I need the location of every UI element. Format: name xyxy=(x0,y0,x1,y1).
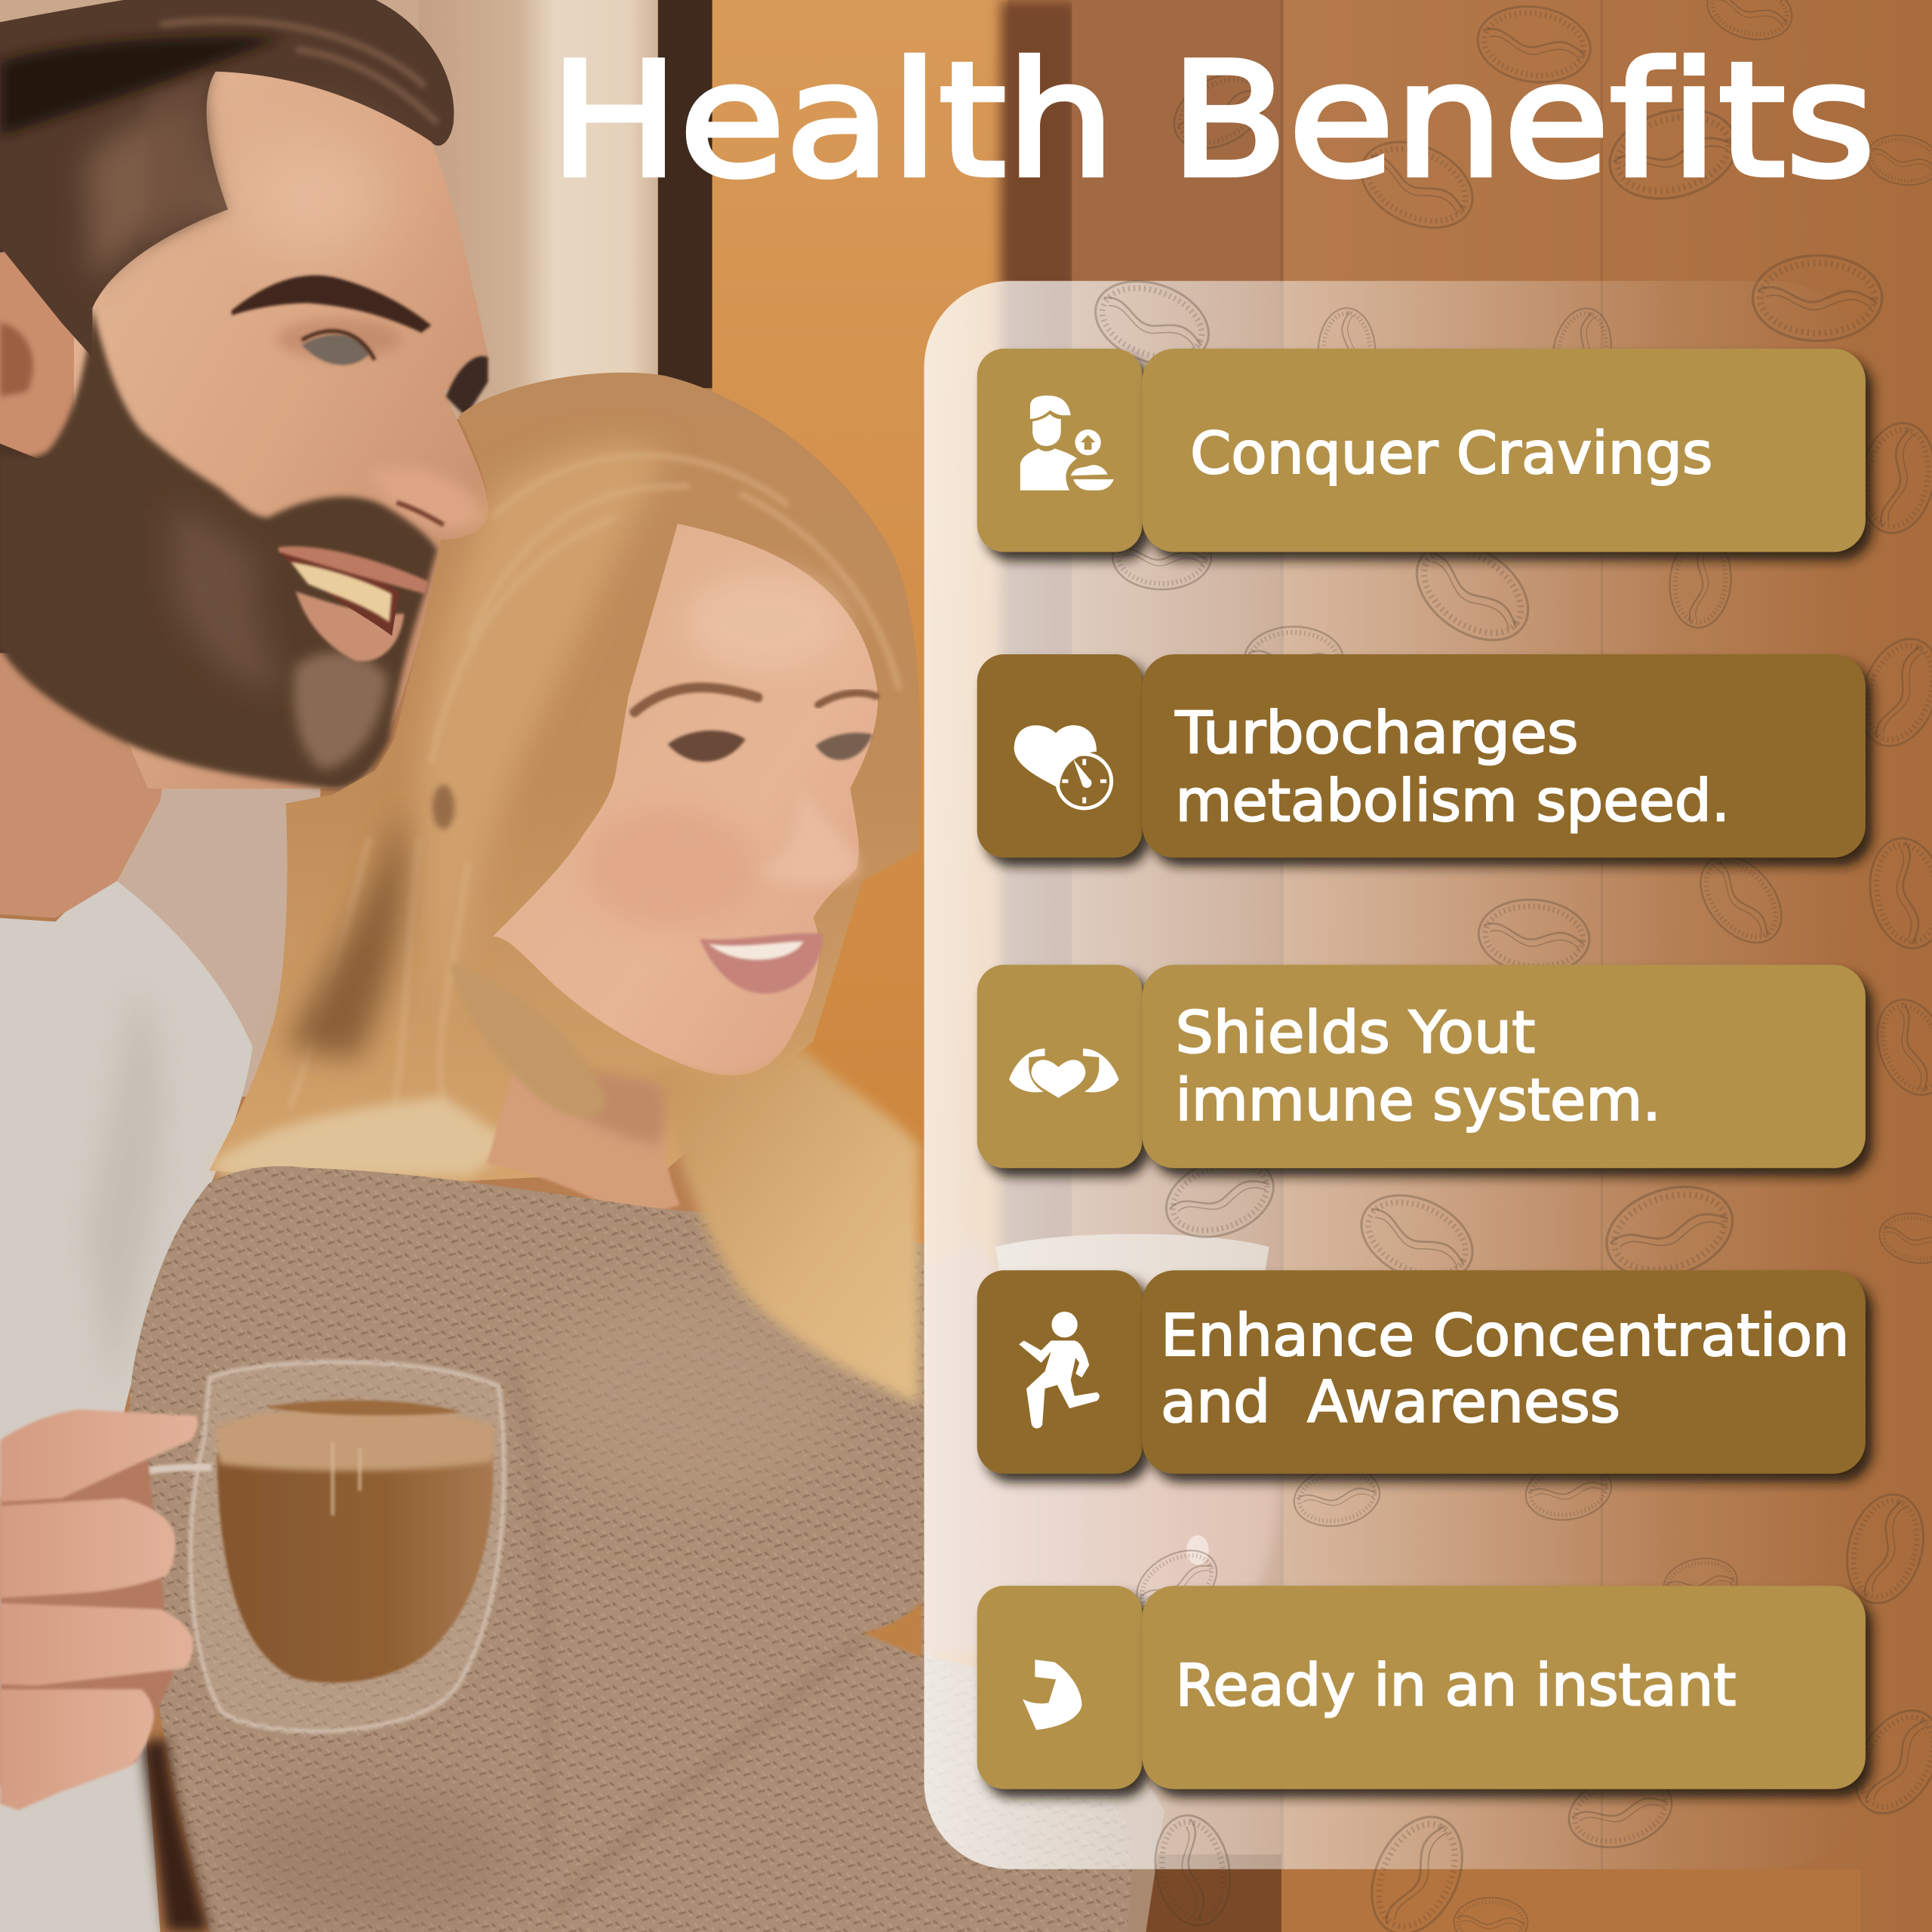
benefit: shields immune system xyxy=(977,964,1866,1168)
face xyxy=(493,524,878,1075)
foam xyxy=(216,1407,495,1471)
wall behind man's head xyxy=(0,0,425,419)
forehead highlight xyxy=(240,136,388,259)
handle xyxy=(89,1467,212,1494)
label line 2: immune system. xyxy=(1176,1067,1661,1134)
eyelid shadow xyxy=(302,331,374,360)
text box xyxy=(1142,654,1866,857)
icon: runner xyxy=(1019,1312,1100,1429)
hair xyxy=(0,0,454,357)
label line 1: Enhance Concentration xyxy=(1161,1303,1850,1370)
icon box xyxy=(977,1586,1142,1789)
lips xyxy=(700,934,823,993)
wall behind couple xyxy=(74,777,320,1097)
blurred hand xyxy=(924,1238,1278,1651)
label: Ready in an instant xyxy=(1176,1653,1736,1720)
icon box xyxy=(977,349,1142,552)
icon: heart with biceps xyxy=(1009,1048,1118,1098)
benefit: enhance concentration xyxy=(977,1270,1866,1474)
hair fade xyxy=(86,105,210,284)
dark wood post xyxy=(1001,0,1077,1932)
eye left xyxy=(668,731,746,761)
hair lock over sweater xyxy=(656,1048,919,1404)
mug of coffee xyxy=(89,1362,504,1731)
lower wood tone xyxy=(1281,1869,1860,1932)
teeth xyxy=(709,941,803,960)
far eye xyxy=(446,356,488,417)
chin patch xyxy=(294,652,388,770)
eye left xyxy=(302,335,370,365)
sweater lower shade xyxy=(222,1786,518,1932)
gap shading xyxy=(0,1459,173,1786)
benefit: ready in an instant xyxy=(977,1586,1866,1789)
hair pale ends xyxy=(210,1097,518,1177)
inner ear xyxy=(0,323,33,397)
man xyxy=(0,0,489,1932)
index finger xyxy=(0,1410,198,1502)
drip highlights xyxy=(333,1441,360,1515)
benefit: conquer cravings xyxy=(977,349,1866,552)
sleeve fold xyxy=(555,1638,863,1910)
eye right xyxy=(816,733,872,760)
nose shade xyxy=(370,467,488,530)
sweater light area xyxy=(530,1281,851,1503)
dark hair front xyxy=(0,36,284,136)
text box xyxy=(1142,1586,1866,1789)
glass rim xyxy=(995,1234,1269,1306)
label: Conquer Cravings xyxy=(1190,420,1712,488)
hair back xyxy=(210,373,921,1183)
hair strands lower xyxy=(290,838,468,1109)
icon: heart with gauge xyxy=(1014,725,1112,808)
hair lock by jaw xyxy=(450,961,606,1117)
coffee bean pattern xyxy=(1084,0,1932,1932)
wood gap at arm xyxy=(863,1601,921,1657)
label line 1: Shields Yout xyxy=(1176,999,1535,1066)
beard xyxy=(0,308,438,789)
label line 2: metabolism speed. xyxy=(1176,768,1730,835)
shadow between couple xyxy=(142,1737,210,1932)
hair base behind ear xyxy=(0,234,111,653)
icon: flexed arm xyxy=(1023,1660,1081,1730)
icon box xyxy=(977,964,1142,1168)
window frame xyxy=(658,0,715,388)
label line 1: Turbocharges xyxy=(1175,700,1578,768)
hair highlight left xyxy=(418,444,666,1023)
mid wood board xyxy=(1072,0,1284,1932)
sweater shading xyxy=(86,986,162,1392)
curtain by window xyxy=(419,0,666,419)
face highlight xyxy=(684,573,844,672)
cheek shade in beard xyxy=(173,505,286,686)
upper lip xyxy=(278,546,429,594)
second finger xyxy=(0,1498,175,1598)
glass body xyxy=(190,1362,504,1731)
neck xyxy=(487,1066,680,1217)
face xyxy=(74,67,489,789)
title: Health Benefits xyxy=(549,29,1875,213)
hair dark lock xyxy=(286,801,405,1060)
hand holding cup behind panel xyxy=(924,1234,1278,1932)
sweater texture xyxy=(129,1166,1134,1932)
light wood panel xyxy=(712,0,1008,1932)
translucent panel xyxy=(924,281,1860,1869)
hairline soft edge xyxy=(148,72,228,247)
teeth xyxy=(291,561,392,622)
label line 2: and Awareness xyxy=(1161,1369,1620,1436)
neck xyxy=(0,592,166,918)
nostril xyxy=(397,503,444,525)
eye socket shade xyxy=(277,319,401,358)
benefit: turbocharges metabolism xyxy=(977,654,1866,857)
sweater xyxy=(129,1166,1134,1932)
blurred sleeve xyxy=(924,1657,1164,1932)
coffee xyxy=(217,1454,493,1683)
lower lip area xyxy=(296,592,405,661)
hair strands xyxy=(160,20,438,123)
icon: person with food xyxy=(1020,395,1114,491)
sweater fold shadow xyxy=(512,1367,549,1860)
ear xyxy=(0,252,89,458)
chin shadow on neck xyxy=(524,1060,678,1146)
hair strands top xyxy=(431,456,900,764)
fingernail xyxy=(1186,1535,1209,1564)
mouth interior xyxy=(278,551,399,635)
eyebrow left xyxy=(635,688,758,712)
third finger xyxy=(0,1603,193,1685)
woman xyxy=(129,373,1134,1932)
text box xyxy=(1142,964,1866,1168)
hair dark by ear xyxy=(432,785,454,829)
icon box xyxy=(977,1270,1142,1474)
man's hand xyxy=(0,1410,198,1810)
nose xyxy=(758,789,857,885)
cheek glow xyxy=(586,807,758,931)
eyebrow left xyxy=(232,275,431,333)
text box xyxy=(1142,349,1866,552)
wood seams xyxy=(1281,0,1601,1932)
glass outline xyxy=(190,1362,504,1731)
lower dark wood xyxy=(1134,1854,1281,1932)
sweater of man xyxy=(0,872,253,1932)
icon box xyxy=(977,654,1142,857)
eyebrow right xyxy=(818,693,876,705)
fourth finger xyxy=(0,1689,154,1810)
text box xyxy=(1142,1270,1866,1474)
foam dark top xyxy=(265,1400,462,1415)
